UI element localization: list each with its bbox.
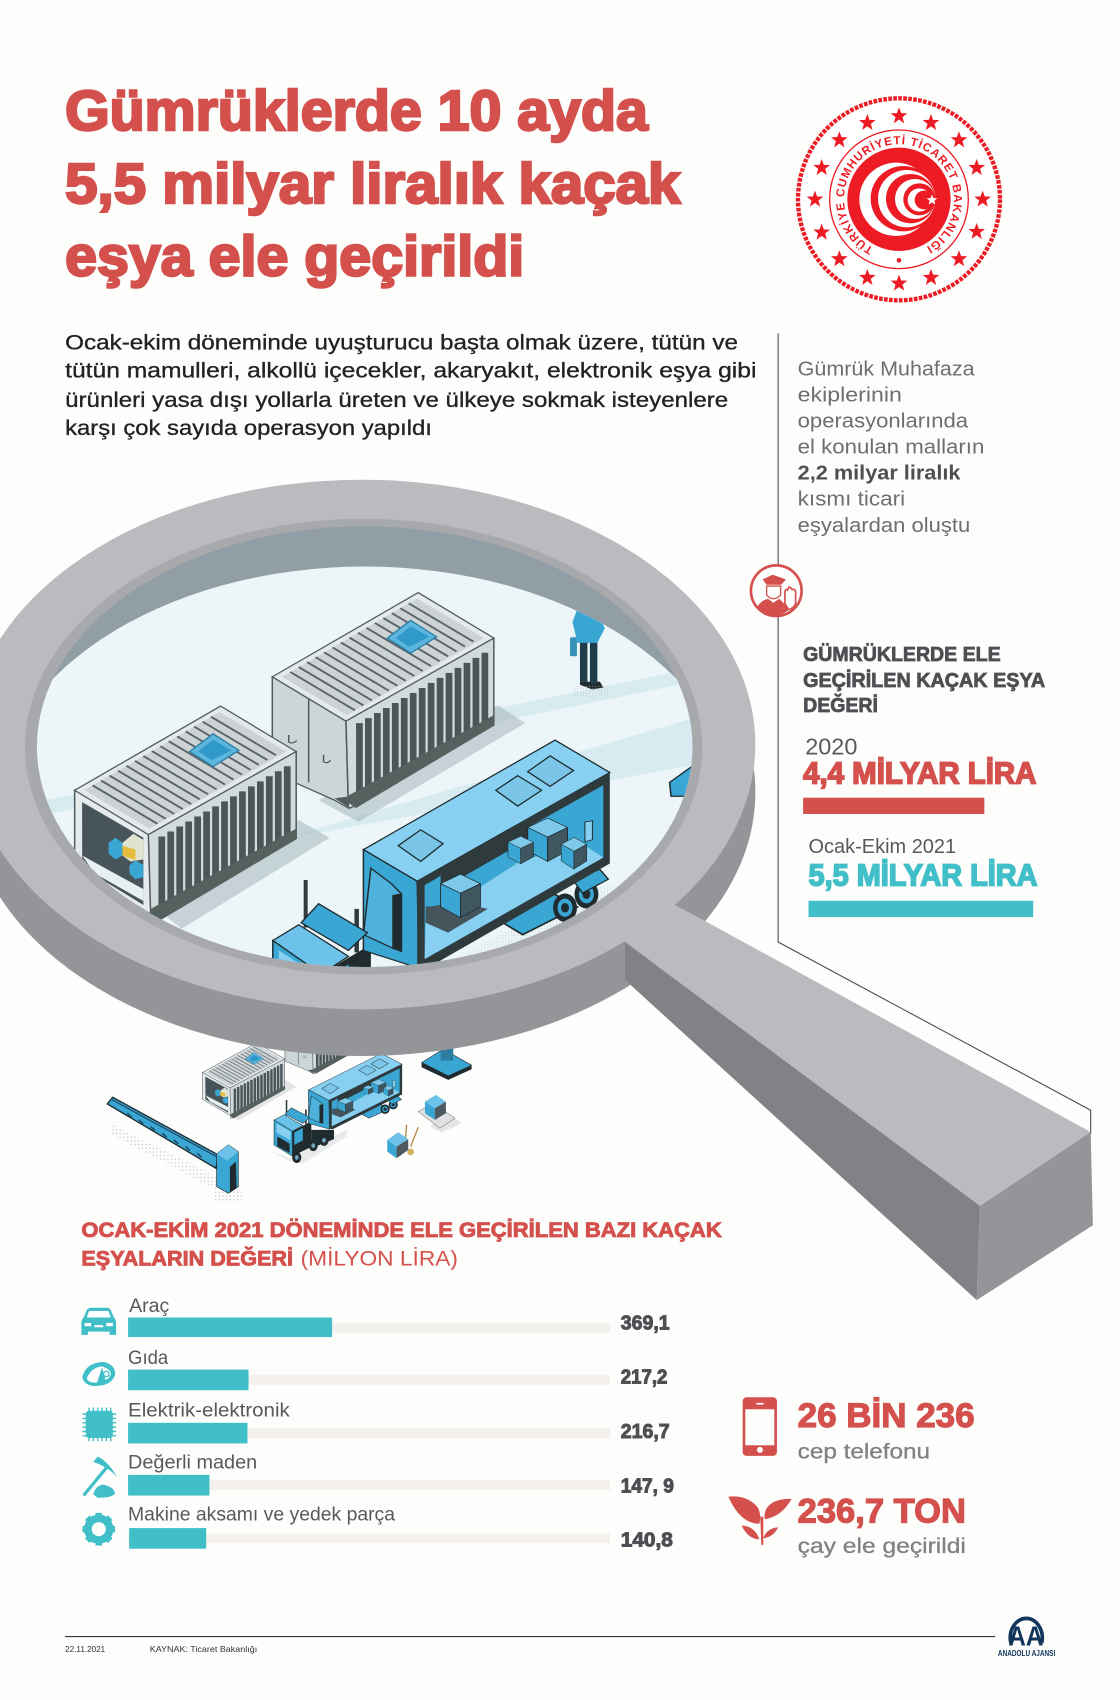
side note: customs enforcement: eşyalardan oluştu <box>798 514 970 537</box>
intro paragraph: karşı çok sayıda operasyon yapıldı <box>65 415 432 440</box>
heading: seized goods value: GÜMRÜKLERDE ELE <box>803 643 1001 666</box>
handle top surface <box>625 895 1091 1206</box>
stat: phones <box>798 1397 975 1464</box>
stat: 2020 value: 4,4 MİLYAR LİRA <box>803 757 1036 791</box>
stat: tea: 236,7 TON <box>798 1493 966 1531</box>
row: electronics: Elektrik-elektronik <box>128 1399 290 1421</box>
ring underside <box>0 529 755 1056</box>
icon: meat <box>82 1362 115 1386</box>
title <box>65 79 681 288</box>
row: precious metals: Değerli maden <box>128 1451 257 1473</box>
ring inner rim <box>25 519 702 975</box>
chart heading: OCAK-EKİM 2021 DÖNEMİNDE ELE GEÇİRİLEN BAZI KAÇAK <box>81 1217 722 1242</box>
magnifying glass <box>0 480 1093 1300</box>
side note: customs enforcement: el konulan malların <box>798 436 984 459</box>
person with bag <box>570 608 610 697</box>
icon: car <box>81 1308 116 1335</box>
side note: customs enforcement: 2,2 milyar liralık <box>798 462 961 485</box>
intro paragraph: Ocak-ekim döneminde uyuşturucu başta olmak üzere, tütün ve <box>65 329 738 354</box>
side bracket line <box>778 333 1091 1134</box>
title: eşya ele geçirildi <box>65 225 524 288</box>
stat: tea: çay ele geçirildi <box>798 1533 966 1558</box>
handle end face <box>977 1132 1093 1300</box>
icon: tea leaves <box>728 1496 792 1545</box>
stat: 2021 value <box>809 835 1038 917</box>
stat: tea <box>798 1493 966 1558</box>
bar chart: seized goods <box>128 1295 674 1552</box>
stat: 2020 value: 2020 <box>805 733 857 759</box>
footer: KAYNAK: Ticaret Bakanlığı <box>150 1645 257 1654</box>
icon: customs officer <box>751 565 802 616</box>
container with doors <box>272 593 494 809</box>
row: machine parts <box>128 1503 673 1552</box>
truck cab <box>272 880 368 966</box>
stat: 2021 value: 5,5 MİLYAR LİRA <box>809 859 1038 893</box>
intro paragraph: ürünleri yasa dışı yollarla üreten ve ülkeye sokmak isteyenlere <box>65 387 728 412</box>
row: food: Gıda <box>128 1347 168 1369</box>
row: electronics: 216,7 <box>621 1420 670 1443</box>
row: vehicles <box>128 1295 670 1337</box>
icon: microchip <box>82 1408 116 1441</box>
row: precious metals: 147, 9 <box>621 1474 674 1497</box>
footer: 22.11.2021 <box>65 1645 106 1654</box>
ministry seal <box>796 96 1002 302</box>
logo: Anadolu Ajansı: ANADOLU AJANSI <box>998 1648 1055 1658</box>
shadows <box>110 1080 462 1203</box>
ministry seal: TÜRKİYE CUMHURİYETİ TİCARET BAKANLIĞI <box>836 134 962 255</box>
row: food <box>128 1347 667 1390</box>
trailer <box>363 740 610 968</box>
road stripes <box>46 673 692 834</box>
lens shadow <box>37 526 692 967</box>
stat: phones: 26 BİN 236 <box>798 1397 975 1435</box>
side note: customs enforcement: kısmı ticari <box>798 488 905 511</box>
title: Gümrüklerde 10 ayda <box>65 79 649 142</box>
ring top surface <box>0 480 755 1009</box>
container front <box>203 1043 285 1118</box>
logo: Anadolu Ajansı: AA <box>1008 1621 1043 1652</box>
truck <box>274 1053 402 1163</box>
side object <box>670 765 694 796</box>
row: precious metals <box>128 1451 674 1497</box>
lens view <box>36 566 692 967</box>
chart heading: EŞYALARIN DEĞERİ <box>81 1245 293 1270</box>
row: electronics <box>128 1399 670 1443</box>
cab rear and chassis <box>335 949 371 967</box>
side note: customs enforcement: operasyonlarında <box>798 410 969 433</box>
heading: seized goods value: DEĞERİ <box>803 693 878 717</box>
side note: customs enforcement: Gümrük Muhafaza <box>798 358 975 381</box>
footer <box>65 1637 995 1654</box>
stat: phones: cep telefonu <box>798 1439 930 1464</box>
icon: gear <box>82 1513 115 1545</box>
row: machine parts: Makine aksamı ve yedek parça <box>128 1503 395 1525</box>
stat: 2021 value: Ocak-Ekim 2021 <box>809 835 956 858</box>
row: machine parts: 140,8 <box>621 1529 673 1552</box>
dotted ground under truck <box>458 884 614 958</box>
intro paragraph: tütün mamulleri, alkollü içecekler, akaryakıt, elektronik eşya gibi <box>65 358 756 383</box>
heading: seized goods value: GEÇİRİLEN KAÇAK EŞYA <box>803 669 1045 692</box>
icon: mobile phone <box>743 1397 777 1456</box>
icon: pickaxe and ore <box>84 1456 117 1498</box>
chart heading <box>81 1217 722 1270</box>
intro paragraph <box>65 329 756 440</box>
container back <box>285 998 367 1074</box>
barrier, boxes and base <box>107 1047 472 1193</box>
side note: customs enforcement <box>798 358 984 537</box>
handle side face <box>625 942 980 1300</box>
logo: Anadolu Ajansı <box>998 1618 1055 1658</box>
container shadows <box>159 705 525 929</box>
side note: customs enforcement: ekiplerinin <box>798 384 902 407</box>
stat: 2020 value <box>803 733 1036 814</box>
row: food: 217,2 <box>621 1366 667 1389</box>
title: 5,5 milyar liralık kaçak <box>65 152 681 215</box>
open container <box>75 706 296 922</box>
row: vehicles: 369,1 <box>621 1311 670 1334</box>
chart heading: (MİLYON LİRA) <box>301 1245 458 1270</box>
heading: seized goods value <box>803 643 1045 717</box>
row: vehicles: Araç <box>129 1295 170 1317</box>
illustration: customs yard below the magnifier <box>107 998 472 1203</box>
